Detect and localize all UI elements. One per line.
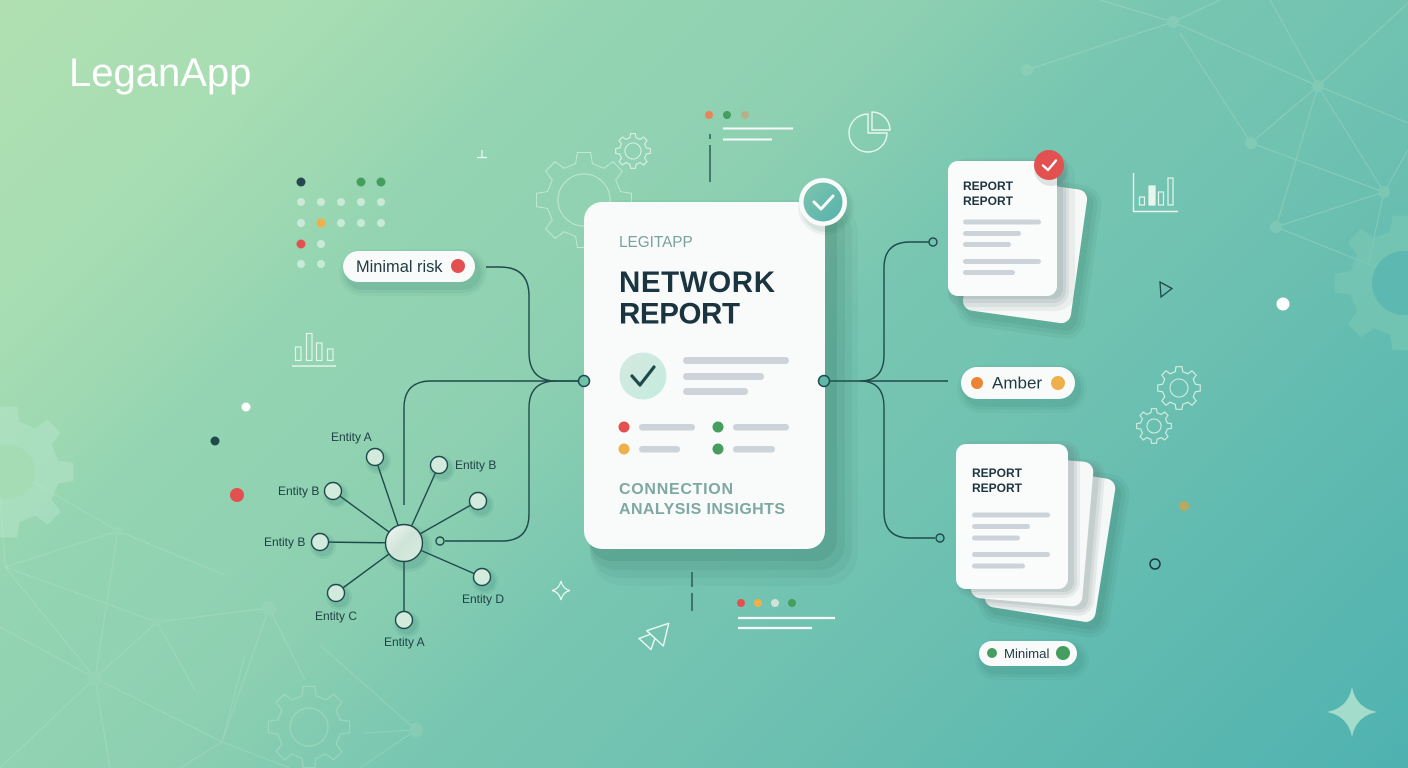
connector node right: [818, 376, 830, 386]
badge: card check: [798, 178, 854, 235]
pill: Minimal risk: [339, 249, 487, 296]
decorative bottom status dots and lines: [692, 572, 835, 628]
pill: Minimal: [975, 639, 1089, 680]
entity labels: [264, 430, 504, 649]
middle sheet: [969, 450, 1106, 617]
central report card: [584, 200, 858, 586]
icon: bar chart right: [1134, 173, 1178, 212]
entity labels: Entity A: [384, 635, 425, 649]
card subtitle: ANALYSIS INSIGHTS: [619, 501, 785, 518]
background network bottom left: [0, 463, 423, 768]
icon: pie chart: [849, 112, 890, 152]
brand label: LEGITAPP: [619, 234, 693, 251]
scattered accent dots: [210, 298, 1290, 569]
icon: triangle outline: [1160, 282, 1172, 297]
icon: check circle: [620, 352, 666, 400]
card shadow: [590, 200, 858, 586]
entity labels: Entity D: [462, 592, 504, 606]
node shadows: [310, 448, 498, 637]
entity labels: Entity B: [278, 484, 319, 498]
card title: NETWORK: [619, 266, 776, 299]
decorative top status dots and lines: [705, 111, 793, 182]
card subtitle: CONNECTION: [619, 481, 733, 498]
card title: [619, 266, 776, 330]
pill: Minimal risk: Minimal risk: [356, 258, 443, 276]
connector lines right: [830, 238, 948, 542]
entity nodes: [312, 448, 490, 628]
report stack top: [948, 150, 1104, 341]
status rows: [618, 422, 789, 454]
front sheet: [948, 161, 1057, 296]
icon: gears right: [1137, 367, 1200, 443]
connector node left: [578, 376, 590, 386]
icon: paper plane: [639, 623, 669, 650]
front sheet: [956, 444, 1068, 589]
central hub: [386, 524, 422, 562]
icon: outline gear behind card: [536, 152, 632, 248]
hub and spoke network: [264, 430, 504, 649]
report stack bottom: REPORT: [972, 481, 1023, 495]
icon: sparkle outline: [552, 581, 570, 600]
pill: Minimal: Minimal: [1004, 646, 1049, 661]
entity labels: Entity C: [315, 609, 357, 623]
pill: Amber: Amber: [992, 374, 1042, 392]
badge: red check: [1034, 150, 1068, 186]
background network top right: [1021, 0, 1408, 280]
icon: outline gear bottom: [268, 686, 350, 768]
icon: large sparkle: [1327, 687, 1377, 737]
card subtitle: [619, 481, 785, 518]
entity labels: Entity B: [455, 458, 496, 472]
dot matrix: [296, 178, 386, 268]
pill: Amber: [957, 365, 1087, 413]
icon: large filled gear left: [0, 407, 73, 537]
back sheet with shadow: [955, 170, 1104, 341]
logo: LeganApp: [69, 51, 251, 95]
front sheet shadow: [948, 158, 1075, 311]
icon: small cross mark: [477, 150, 487, 158]
report stack top: REPORT: [963, 179, 1014, 193]
report stack bottom: [956, 441, 1132, 641]
report stack bottom: REPORT: [972, 466, 1023, 480]
front sheet shadow: [956, 441, 1080, 598]
back sheet: [976, 457, 1132, 641]
icon: large filled gear right: [1335, 216, 1408, 350]
icon: small bar chart left: [292, 334, 336, 366]
entity labels: Entity A: [331, 430, 372, 444]
text placeholder bars: [683, 357, 789, 395]
entity labels: Entity B: [264, 535, 305, 549]
icon: small gear top: [616, 134, 650, 168]
report stack top: REPORT: [963, 194, 1014, 208]
card title: REPORT: [619, 298, 740, 330]
connector lines left: [404, 267, 578, 545]
